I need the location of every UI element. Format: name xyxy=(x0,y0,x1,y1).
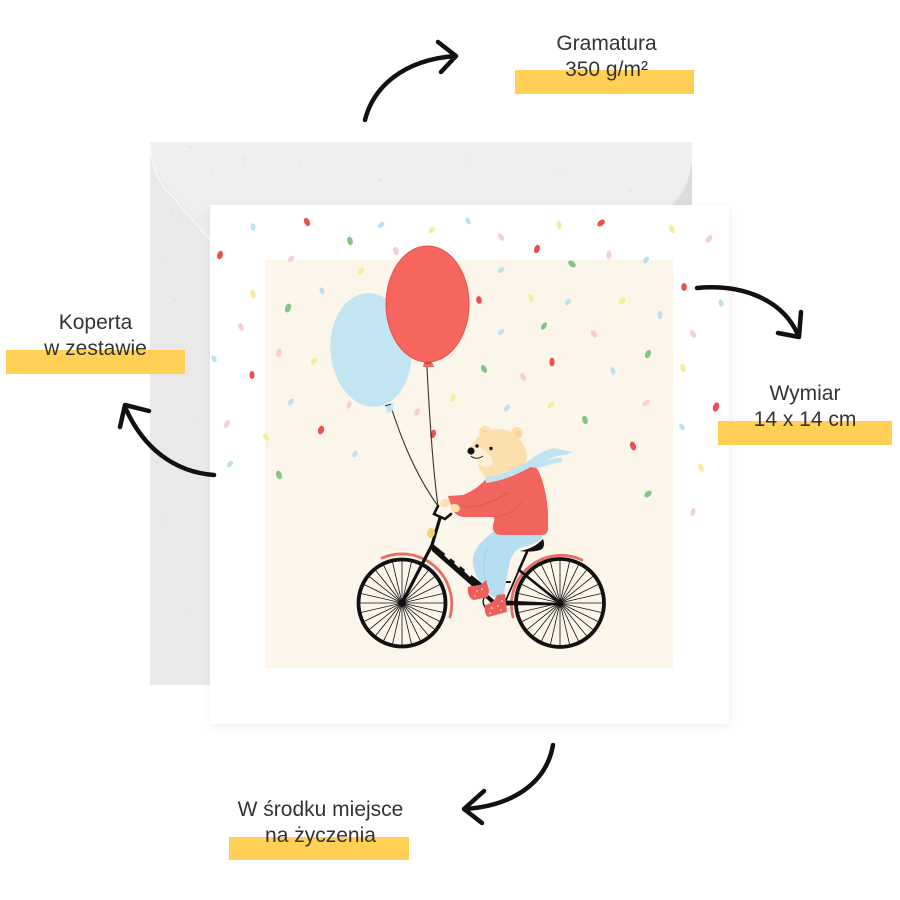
label: size: 14 x 14 cm xyxy=(754,408,856,431)
label: size xyxy=(718,382,892,445)
saddle xyxy=(520,539,544,552)
frame xyxy=(402,506,560,609)
label: inside: W środku miejsce xyxy=(238,798,403,821)
label: inside: na życzenia xyxy=(265,824,376,847)
label: size: Wymiar xyxy=(770,382,840,405)
arrow: to inside xyxy=(464,745,553,823)
label: envelope: w zestawie xyxy=(44,337,147,360)
label: envelope: Koperta xyxy=(59,311,132,334)
wheels xyxy=(358,559,604,647)
arrow: to grammage xyxy=(365,42,456,120)
envelope xyxy=(150,142,692,685)
head xyxy=(471,429,527,479)
bear xyxy=(439,426,573,617)
sweater xyxy=(448,464,548,535)
ears xyxy=(479,426,523,439)
arrow: to size xyxy=(697,287,801,337)
red balloon xyxy=(386,246,469,367)
balloon strings xyxy=(392,367,438,506)
bicycle xyxy=(358,506,604,647)
label: grammage: 350 g/m² xyxy=(565,58,648,81)
greeting card xyxy=(120,42,801,823)
hands xyxy=(439,498,461,513)
arrow: to envelope xyxy=(120,405,214,475)
face xyxy=(467,444,493,458)
confetti xyxy=(211,217,724,516)
muzzle xyxy=(470,447,492,467)
lamp xyxy=(426,527,436,539)
cream illustration panel xyxy=(265,260,673,668)
label: grammage xyxy=(515,32,694,94)
fenders xyxy=(382,554,582,617)
shoes xyxy=(468,580,507,617)
label: envelope xyxy=(6,311,185,374)
scarf xyxy=(485,448,573,483)
label: inside xyxy=(229,798,409,860)
label: grammage: Gramatura xyxy=(556,32,657,55)
legs xyxy=(473,530,544,598)
blue balloon xyxy=(326,290,416,413)
